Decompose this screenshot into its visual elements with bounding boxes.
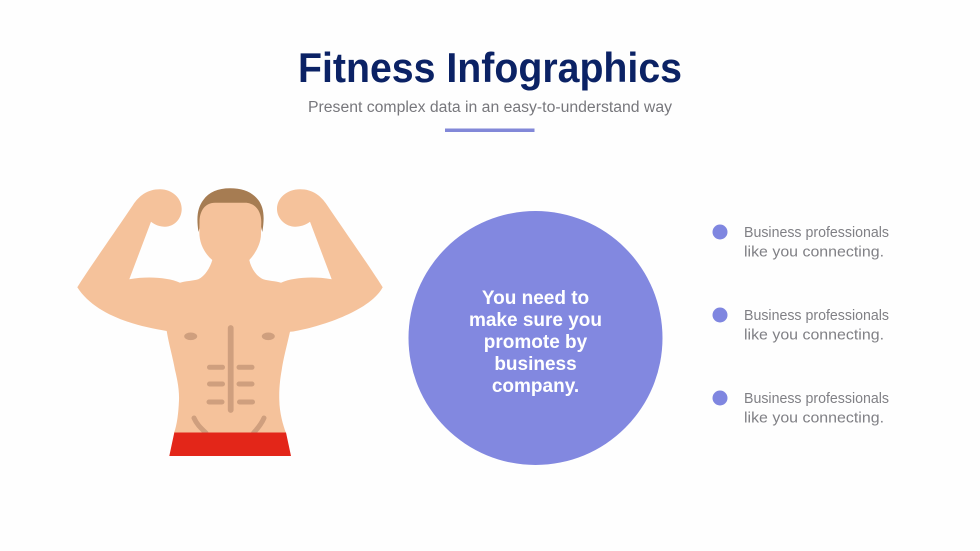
accent bar (445, 128, 534, 132)
circle text (469, 288, 602, 397)
body (77, 189, 383, 433)
circle text: promote by (484, 332, 588, 353)
hair (197, 188, 264, 232)
subtitle: Present complex data in an easy-to-understand way (308, 99, 672, 116)
red shorts (169, 432, 291, 456)
list item 2: like you connecting. (744, 326, 884, 344)
circle text: make sure you (469, 310, 602, 331)
list item 2: Business professionals (744, 307, 889, 324)
list item 3: like you connecting. (744, 410, 884, 426)
list item 1: like you connecting. (744, 244, 884, 260)
title: Fitness Infographics (298, 44, 682, 91)
circle text: You need to (482, 288, 589, 309)
circle text: business (494, 354, 577, 375)
list item 1 (712, 224, 889, 260)
left nipple (184, 332, 197, 340)
right nipple (262, 332, 275, 340)
abdominal lines (194, 328, 264, 433)
central circle with message (408, 211, 662, 465)
circle text: company. (492, 376, 579, 397)
illustration: flexing muscular man (77, 188, 383, 456)
list item 3 (712, 390, 889, 426)
list item 1: Business professionals (744, 224, 889, 241)
list item 2 (712, 307, 889, 344)
list item 3: Business professionals (744, 390, 889, 407)
